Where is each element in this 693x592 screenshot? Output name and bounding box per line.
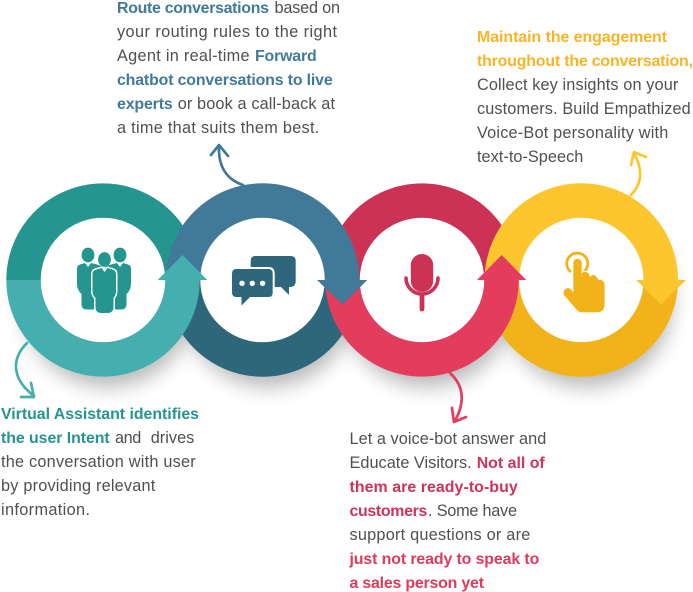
text block: route conversations: or book a call-back at: [178, 95, 335, 113]
icon: chat bubbles: [232, 256, 296, 306]
text block: maintain the engagement: [477, 29, 693, 166]
ring 3 bottom half with arrow: [325, 255, 526, 377]
ring 1 top half: [6, 183, 200, 280]
text block: virtual assistant: Virtual Assistant identifies: [1, 406, 199, 423]
ring 4 bottom half: [485, 280, 678, 377]
text block: voice-bot answer: .: [428, 502, 433, 520]
text block: route conversations: Forward: [255, 48, 317, 65]
text block: maintain the engagement: text-to-Speech: [477, 148, 583, 166]
text block: maintain the engagement: throughout the conversation,: [477, 53, 693, 70]
ring 4 top half: [485, 183, 678, 280]
text block: voice-bot answer: Educate Visitors.: [350, 454, 472, 472]
text block: voice-bot answer: them are ready-to-buy: [350, 479, 518, 496]
text block: virtual assistant: information.: [1, 501, 90, 519]
text block: voice-bot answer: [348, 430, 546, 592]
text block: voice-bot answer: Some have: [437, 502, 517, 520]
text block: virtual assistant: and: [115, 429, 141, 447]
text block: voice-bot answer: support questions or are: [350, 526, 530, 544]
ring 3 top half: [325, 183, 519, 280]
text block: route conversations: experts: [117, 96, 173, 113]
ring 2 top half: [166, 183, 359, 280]
text block: voice-bot answer: customers: [350, 503, 427, 520]
text block: virtual assistant: the conversation with user: [1, 453, 196, 471]
text block: route conversations: Agent in real-time: [117, 47, 250, 65]
arrow: ring 4 to right text: [631, 152, 646, 195]
text block: maintain the engagement: Collect key insights on your: [477, 76, 679, 94]
text block: route conversations: Route conversations: [117, 0, 269, 17]
icon: touch hand: [563, 253, 605, 312]
arrow: ring 3 to bottom text: [450, 373, 466, 422]
ring 1 bottom half with arrow: [6, 255, 207, 377]
ring 2 bottom half: [166, 280, 359, 377]
text block: virtual assistant: drives: [151, 429, 194, 447]
text block: route conversations: your routing rules to the right: [117, 23, 337, 41]
text block: virtual assistant: the user Intent: [1, 430, 110, 447]
text block: maintain the engagement: Voice-Bot personality with: [477, 124, 668, 142]
ring 4 arrow: [636, 280, 686, 304]
text block: route conversations: a time that suits them best.: [117, 119, 319, 137]
text block: maintain the engagement: Maintain the engagement: [477, 29, 668, 46]
text block: voice-bot answer: Let a voice-bot answer and: [350, 430, 546, 448]
text block: voice-bot answer: a sales person yet: [350, 575, 485, 592]
text block: route conversations: chatbot conversations to live: [117, 72, 333, 89]
text block: virtual assistant: by providing relevant: [1, 477, 156, 495]
text block: route conversations: [117, 0, 340, 137]
ring 2 arrow: [317, 280, 367, 304]
arrow: ring 1 to left text: [16, 343, 34, 397]
text block: maintain the engagement: customers. Build Empathized: [477, 100, 691, 118]
arrow: ring 2 to top text: [211, 145, 243, 185]
circle shadows: [23, 217, 672, 387]
icon: microphone: [406, 254, 438, 309]
text block: voice-bot answer: Not all of: [477, 455, 545, 472]
text block: voice-bot answer: just not ready to speak to: [348, 551, 540, 568]
text block: virtual assistant: [1, 406, 199, 519]
icon: business people: [77, 248, 131, 313]
